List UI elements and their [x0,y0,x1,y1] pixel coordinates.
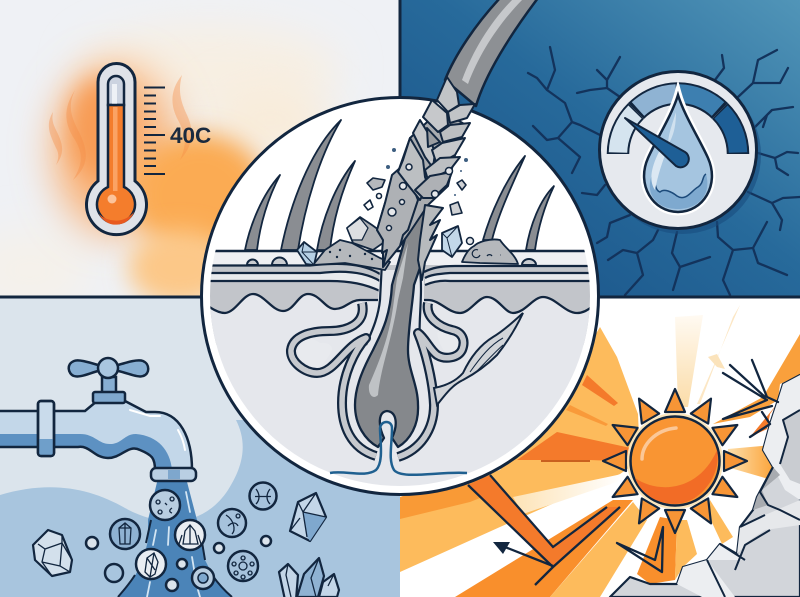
blue wave [0,420,420,597]
water drop [644,93,712,212]
crystal on skin: right [442,226,462,257]
gauge dial [600,72,761,234]
faucet [0,358,196,481]
arrector muscle [434,313,523,405]
gauge needle [625,118,689,167]
crystal on skin: left [297,242,317,265]
scalp layers [204,251,598,500]
panel: heat [0,0,400,310]
damaged hair shaft [377,0,538,280]
crystal cluster [279,558,339,597]
panel: hard water [0,297,420,597]
heat waves [49,75,192,180]
thermometer [87,64,146,235]
reflected beam [468,475,620,585]
gland and sheath: left [291,303,376,456]
crystal: right [290,493,326,541]
debris pile: left [313,217,390,270]
heat arrows on rock [617,360,778,572]
sun [603,389,747,533]
debris particles [364,148,468,215]
cracks [528,47,800,295]
gland and sheath: right [398,303,464,457]
papilla [330,422,467,475]
smooth upper hair [445,0,538,106]
panel: sun damage [400,297,800,597]
hair shaft and bulb [355,200,428,447]
hair scales [377,77,475,280]
circle base [202,98,598,494]
scale chips [386,164,452,230]
particle glyphs [119,489,271,579]
debris pile: right [462,238,518,264]
temperature scale [144,88,165,174]
central hair cross-section [202,0,598,500]
crystal: left [33,530,72,576]
scale backing [377,110,466,267]
mineral particles [86,482,276,591]
sun rays [400,305,800,597]
skin bumps [247,258,536,265]
rocks [610,375,800,597]
fine hairs [245,120,554,250]
follicle sheath strip [366,262,424,345]
water stream [118,478,232,597]
panel dividers [0,0,800,297]
label: 40C: 40C [170,123,211,148]
panel: dehydration [400,0,800,297]
